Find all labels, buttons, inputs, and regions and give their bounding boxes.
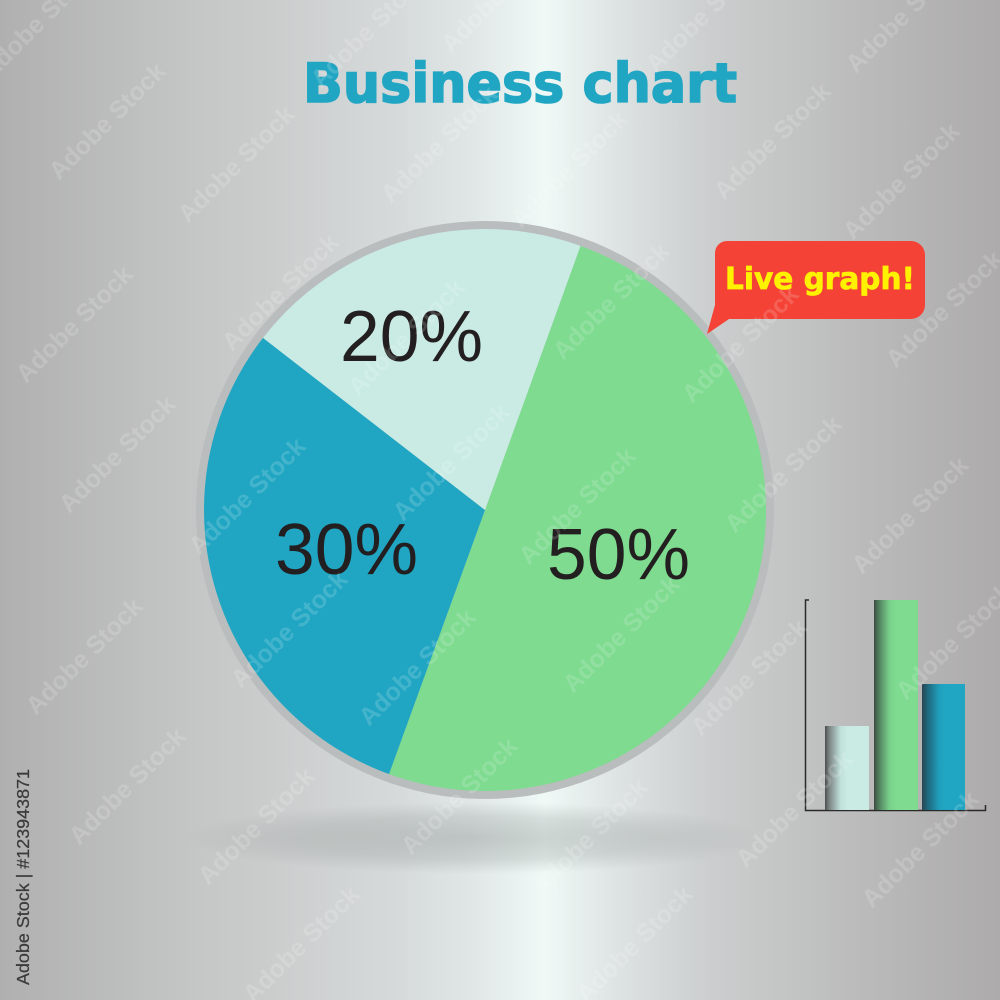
watermark pattern: Adobe Stock — [395, 732, 523, 860]
bar: blue — [922, 684, 965, 810]
watermark pattern: Adobe Stock — [43, 57, 171, 185]
watermark pattern: Adobe Stock — [708, 77, 836, 205]
watermark pattern: Adobe Stock — [676, 280, 804, 408]
watermark pattern: Adobe Stock — [525, 773, 653, 901]
slice: 30% — [204, 338, 485, 774]
bar: light — [825, 726, 869, 810]
watermark pattern: Adobe Stock — [513, 442, 641, 570]
watermark pattern: Adobe Stock — [837, 117, 965, 245]
watermark pattern: Adobe Stock — [216, 228, 344, 356]
pie ring — [196, 221, 774, 799]
callout — [707, 241, 925, 334]
watermark pattern: Adobe Stock — [547, 237, 675, 365]
watermark pattern: Adobe Stock — [557, 570, 685, 698]
callout bubble — [707, 241, 925, 334]
callout text: Live graph! — [725, 262, 915, 297]
stock id text: Adobe Stock | #123943871 — [13, 769, 33, 985]
watermark pattern: Adobe Stock — [719, 410, 847, 538]
watermark pattern: Adobe Stock — [730, 745, 858, 873]
watermark pattern: Adobe Stock — [505, 105, 633, 233]
pie shadow — [185, 802, 765, 874]
slice: 50% — [389, 246, 766, 791]
watermark pattern: Adobe Stock — [342, 273, 470, 401]
watermark pattern: Adobe Stock — [387, 398, 515, 526]
slice: 20% — [263, 229, 580, 510]
watermark pattern: Adobe Stock — [20, 592, 148, 720]
bar chart — [806, 600, 986, 810]
watermark pattern: Adobe Stock — [846, 451, 974, 579]
label: 30%: 30% — [275, 510, 418, 590]
watermark pattern: Adobe Stock — [685, 613, 813, 741]
watermark pattern: Adobe Stock — [53, 390, 181, 518]
watermark pattern: Adobe Stock — [172, 100, 300, 228]
watermark pattern: Adobe Stock — [192, 762, 320, 890]
chart axes — [806, 600, 986, 810]
watermark pattern: Adobe Stock — [183, 432, 311, 560]
watermark pattern: Adobe Stock — [375, 80, 503, 208]
watermark pattern: Adobe Stock — [856, 785, 984, 913]
watermark pattern: Adobe Stock — [225, 565, 353, 693]
watermark pattern: Adobe Stock — [63, 722, 191, 850]
bar: green — [874, 600, 918, 810]
watermark pattern: Adobe Stock — [353, 603, 481, 731]
label: 20%: 20% — [340, 297, 483, 377]
watermark pattern: Adobe Stock — [10, 260, 138, 388]
title: Business chart — [303, 52, 737, 115]
pie chart — [196, 221, 774, 799]
label: 50%: 50% — [547, 515, 690, 595]
